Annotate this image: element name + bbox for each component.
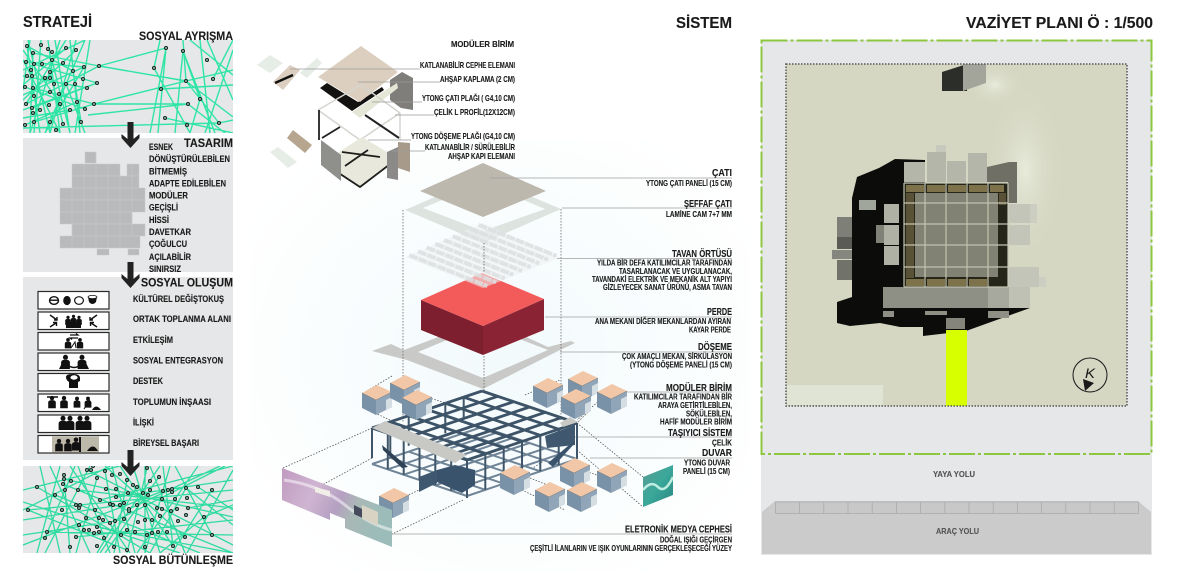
layer: ceiling art tiles (405, 223, 560, 288)
labels: main system: TAVANDAKİ ELEKTRİK VE MEKANİK ALT YAPIYI (592, 275, 732, 284)
labels: main system: ÇELİK (712, 438, 732, 448)
icon: north arrow (1073, 358, 1107, 392)
yellow path (946, 330, 967, 406)
labels: modular unit (411, 39, 515, 161)
top modules (904, 145, 987, 182)
labels: main system: HAFİF MODÜLER BİRİM (660, 418, 732, 426)
title: strateji: STRATEJİ (23, 13, 92, 31)
floor plate (322, 137, 397, 187)
building plan (832, 64, 1046, 406)
site boundary dashed (762, 40, 1152, 454)
labels: main system: YTONG ÇATI PANELİ (15 CM) (646, 179, 732, 188)
list: social outcomes: BİREYSEL BAŞARI (133, 438, 199, 448)
upper right grey panel (390, 72, 413, 110)
title: sistem: SİSTEM (676, 14, 732, 32)
icon: interaction (65, 334, 83, 348)
panel: tasarım (23, 138, 233, 272)
floating wood panels (273, 65, 312, 153)
leaders: main system (385, 178, 732, 534)
list: design qualities: ESNEK (149, 142, 173, 152)
ghost modules right (1009, 204, 1046, 287)
list: social outcomes: TOPLUMUN İNŞAASI (133, 397, 211, 407)
labels: main system: DUVAR (702, 448, 733, 459)
labels: main system: LAMİNE CAM 7+7 MM (666, 210, 732, 219)
left modules (832, 200, 884, 280)
door panels (321, 140, 341, 181)
steel frame (318, 85, 400, 140)
arrow: tasarım to oluşum (122, 262, 140, 288)
list: social outcomes (133, 293, 231, 448)
black roof layer (320, 83, 384, 111)
labels: modular unit: AHŞAP KAPLAMA (2 CM) (440, 75, 515, 84)
labels: main system: MODÜLER BİRİM (666, 381, 732, 394)
layer: red curtain box (421, 273, 544, 355)
list: social outcomes: ORTAK TOPLANMA ALANI (133, 314, 231, 324)
wood cladding (318, 46, 398, 102)
diagram: exploded modular unit (257, 46, 413, 187)
list: design qualities: BİTMEMİŞ (149, 166, 187, 176)
grey terrace bar (883, 287, 988, 308)
labels: main system: TASARLANACAK VE UYGULANACAK, (619, 267, 732, 276)
labels: main system: ÇEŞİTLİ İLANLARIN VE IŞIK OYUNLARININ GERÇEKLEŞECEĞİ YÜZEY (530, 544, 732, 553)
site plot (786, 63, 1127, 406)
labels: main system: PERDE (707, 307, 732, 318)
list: social outcomes: DESTEK (133, 376, 163, 386)
labels: main system: ARAYA GETİRTİLEBİLEN, (658, 401, 732, 410)
icon: individual achievement (52, 436, 99, 452)
media screen right (643, 465, 673, 507)
labels: main system: TAŞIYICI SİSTEM (668, 426, 732, 439)
road: araç yolu (762, 501, 1151, 554)
heading: sosyal bütünleşme: SOSYAL BÜTÜNLEŞME (113, 552, 233, 567)
panel: sosyal ayrışma network (23, 40, 233, 133)
labels: main system: ÇOK AMAÇLI MEKAN, SİRKÜLASYON (622, 352, 732, 361)
icon: relationship pairs (59, 416, 91, 430)
heading: sosyal oluşum: SOSYAL OLUŞUM (141, 276, 233, 290)
labels: main system: (YTONG DÖŞEME PANELİ (15 CM) (630, 360, 732, 370)
background wash (250, 140, 750, 572)
labels: modular unit: KATLANABİLİR CEPHE ELEMANI (420, 60, 515, 70)
labels: main system: SÖKÜLEBİLEN, (686, 410, 732, 418)
labels: main system (530, 168, 733, 553)
title: vaziyet planı: VAZİYET PLANI Ö : 1/500 (966, 13, 1153, 32)
list: social outcomes: KÜLTÜREL DEĞİŞTOKUŞ (133, 293, 224, 304)
labels: modular unit: ÇELİK L PROFİL(12X12CM) (434, 107, 515, 117)
labels: main system: DÖŞEME (698, 340, 732, 353)
layer: floor slab (372, 320, 575, 389)
list: design qualities: ADAPTE EDİLEBİLEN (149, 178, 226, 188)
labels: modular unit: MODÜLER BİRİM (451, 39, 514, 49)
list: design qualities: DAVETKAR (149, 227, 191, 237)
panel: sosyal bütünleşme network (23, 466, 233, 553)
top right module (987, 162, 1017, 203)
labels: main system: TAVAN ÖRTÜSÜ (672, 247, 732, 260)
list: design qualities: DÖNÜŞTÜRÜLEBİLEN (149, 154, 230, 164)
black mass (837, 159, 1030, 336)
icon: community builders (47, 396, 101, 410)
parking strip (776, 502, 1138, 514)
labels: modular unit: KATLANABİLİR / SÜRÜLEBİLİR (425, 142, 515, 152)
list: design qualities: HİSSİ (149, 215, 169, 225)
list: design qualities: GEÇİŞLİ (149, 202, 178, 212)
label: yaya yolu: YAYA YOLU (933, 469, 975, 479)
list: design qualities: AÇILABİLİR (149, 252, 191, 262)
floor beams (322, 150, 398, 187)
labels: main system: KAYAR PERDE (689, 326, 731, 334)
list: social outcomes: İLİŞKİ (133, 418, 154, 428)
courtyard (904, 183, 1008, 287)
labels: modular unit: AHŞAP KAPI ELEMANI (448, 152, 515, 161)
list: design qualities: SINIRSIZ (149, 264, 181, 274)
panel: sosyal oluşum (23, 277, 233, 460)
icon: support head (66, 374, 80, 388)
list: social outcomes: ETKİLEŞİM (133, 335, 173, 345)
labels: main system: KATILIMCILAR TARAFINDAN BİR (634, 392, 732, 402)
left pale modules (884, 204, 899, 265)
labels: main system: ŞEFFAF ÇATI (684, 199, 732, 210)
entrance block (946, 318, 965, 329)
list: social outcomes: SOSYAL ENTEGRASYON (133, 356, 223, 366)
arrow: ayrışma to tasarım (122, 122, 140, 148)
structure: steel carrier system (372, 391, 578, 498)
icon boxes (38, 292, 109, 453)
labels: modular unit: YTONG ÇATI PLAĞI ( G4,10 CM) (422, 92, 515, 103)
arrow: oluşum to bütünleşme (122, 450, 140, 476)
labels: main system: ANA MEKANI DİĞER MEKANLARDAN AYIRAN (595, 317, 731, 326)
icon: integration (59, 355, 89, 369)
labels: main system: PANELİ (15 CM) (683, 467, 730, 476)
icon: gathering with arrows (50, 315, 97, 328)
labels: main system: YILDA BİR DEFA KATILIMCILAR TARAFINDAN (597, 258, 732, 268)
layer: transparent roof ring (405, 176, 561, 243)
dotted connector lines (283, 376, 643, 535)
label: araç yolu: ARAÇ YOLU (936, 526, 979, 536)
modular plan diagram (60, 152, 145, 255)
panel: site background (761, 40, 1152, 555)
heading: tasarım: TASARIM (184, 136, 233, 150)
pale roof plate (352, 83, 398, 118)
labels: main system: ELETRONİK MEDYA CEPHESİ (625, 522, 732, 536)
icon: north arrow: K (1085, 365, 1096, 381)
floating façade ghosts (257, 55, 322, 168)
labels: main system: YTONG DUVAR (684, 458, 730, 468)
concrete band on front (372, 421, 467, 463)
labels: modular unit: YTONG DÖŞEME PLAĞI (G4,10 CM) (411, 130, 515, 141)
layer: roof panel (420, 163, 546, 217)
labels: main system: DOĞAL IŞIĞI GEÇİRGEN (660, 536, 732, 544)
labels: main system: GİZLEYECEK SANAT ÜRÜNÜ, ASMA TAVAN (603, 283, 732, 292)
icon: cultural heads (49, 295, 97, 305)
heading: sosyal ayrışma: SOSYAL AYRIŞMA (139, 29, 233, 43)
modular units (362, 371, 627, 518)
list: design qualities (149, 142, 230, 274)
list: design qualities: ÇOĞULCU (149, 238, 187, 249)
list: design qualities: MODÜLER (149, 190, 188, 200)
plot dotted boundary (786, 64, 1127, 406)
dotted alignment lines (403, 209, 561, 423)
electronic media façade (282, 468, 392, 547)
leaders: modular unit (290, 69, 440, 151)
top box (942, 64, 967, 91)
dark wall panels (419, 470, 437, 492)
labels: main system: ÇATI (712, 168, 732, 179)
